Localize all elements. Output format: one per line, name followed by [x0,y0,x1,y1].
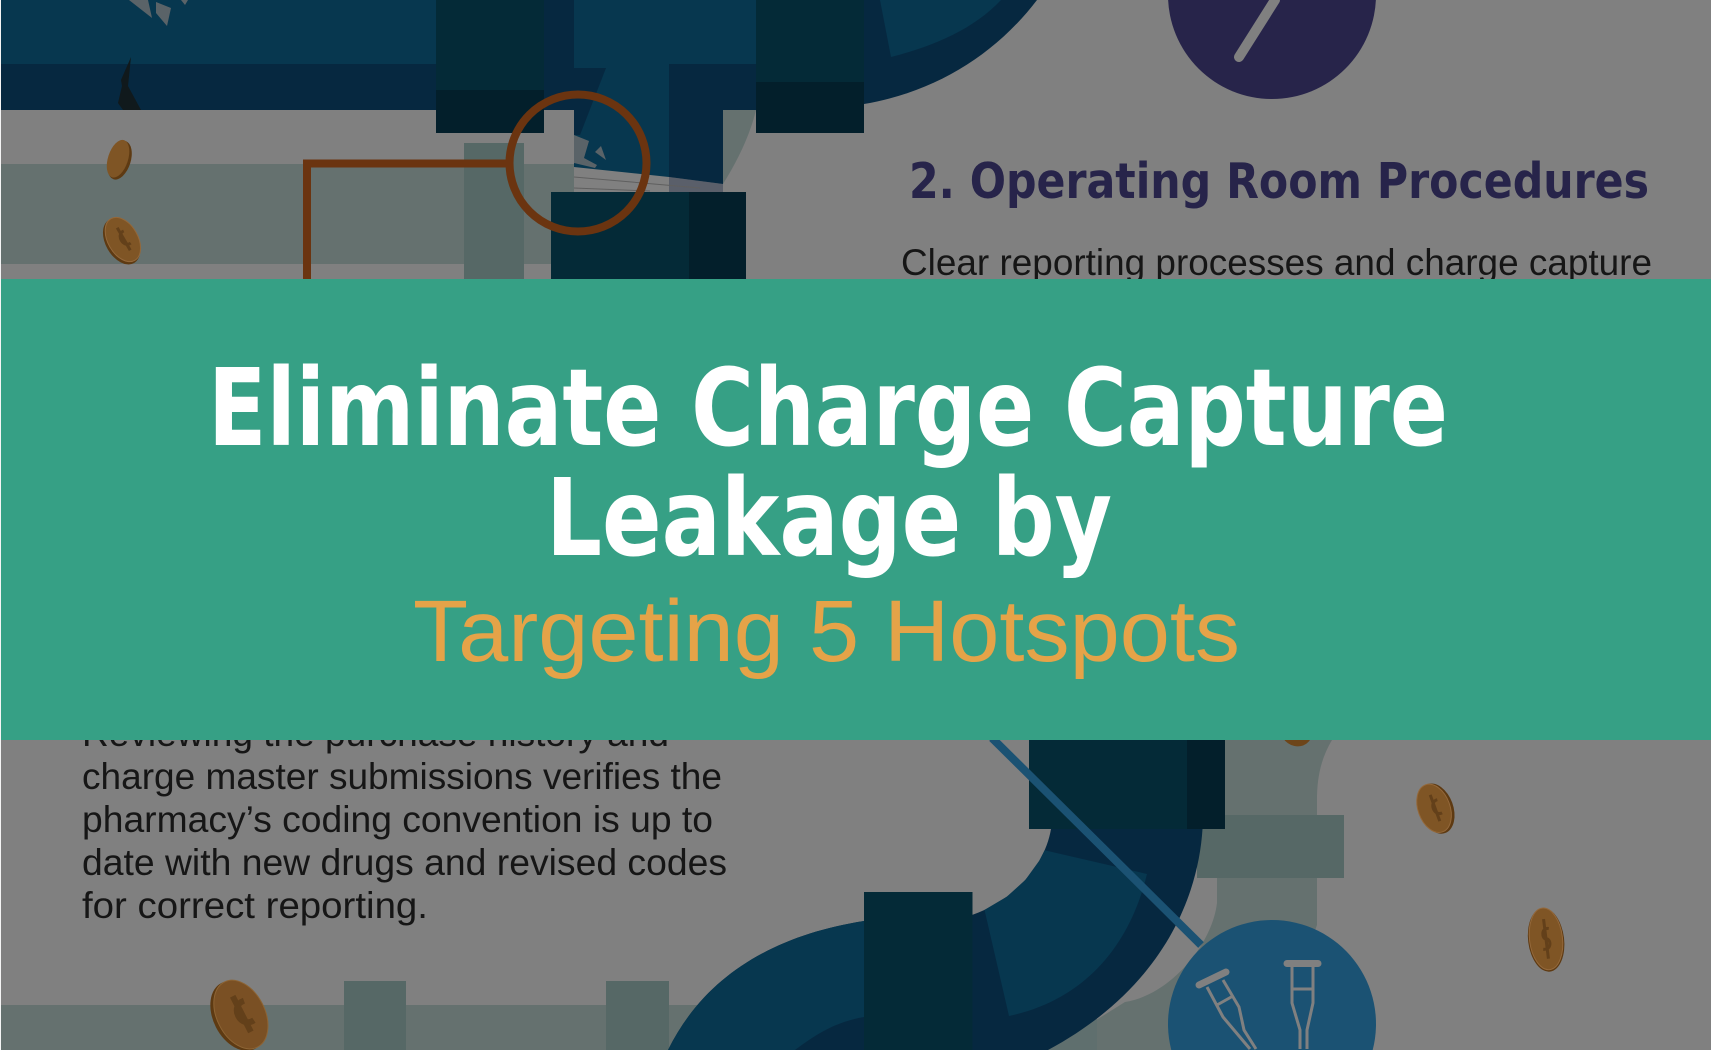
pipe flange upper [1029,740,1225,829]
crutch right [1287,964,1318,1049]
subtitle: Targeting 5 Hotspots [413,583,1240,680]
pipe elbow top right [864,0,1037,104]
pipe crack [118,57,141,110]
pipe flange lower left [864,892,972,1050]
pipe shards [129,0,188,26]
pipe flange left [436,0,544,133]
ground pipe [1,1005,701,1050]
coin [1410,778,1461,839]
text block: pharmacy: charge master submissions verifies the [82,756,722,797]
gray-teal background pipe [1,164,574,264]
pipe post [606,981,669,1050]
coin [1273,705,1319,753]
coin [102,137,136,183]
torn vertical pipe [565,0,756,192]
heading: operating room: 2. Operating Room Procedures [909,153,1649,210]
icon: navy clipboard circle [1168,0,1376,99]
callout: orange leak ring [307,94,646,279]
gray-teal curved pipe [723,110,756,184]
text block: pharmacy: date with new drugs and revised codes [82,842,727,883]
pipe section [1048,1015,1097,1050]
text block: pharmacy: pharmacy’s coding convention is up to [82,799,713,840]
coin [1524,906,1568,974]
icon: crutches circle [1168,920,1376,1050]
text block: operating room: Clear reporting processes and charge capture [901,242,1652,283]
pipe post [344,981,406,1050]
crutch left [1199,972,1256,1049]
pipe flange right [756,0,864,133]
panel: bottom pipe illustration [1,705,1568,1050]
panel: top pipe illustration [1,0,1037,279]
coin [95,211,149,271]
title line one: Eliminate Charge Capture [208,347,1448,471]
panel: title banner [0,279,1711,740]
text block: pharmacy: for correct reporting. [82,885,428,926]
pipe flange lower [551,192,746,279]
coin [199,971,279,1050]
connector line [992,738,1201,945]
title line two: Leakage by [546,457,1112,581]
text block: pharmacy: Reviewing the purchase history and [82,713,669,754]
main horizontal pipe [1,0,861,110]
pipe flange gray [1197,815,1344,878]
text block: pharmacy [82,713,727,926]
gray-teal pipe post [464,143,524,279]
pipe elbow lower [668,829,1202,1050]
gray-teal pipe right [1048,740,1332,1050]
